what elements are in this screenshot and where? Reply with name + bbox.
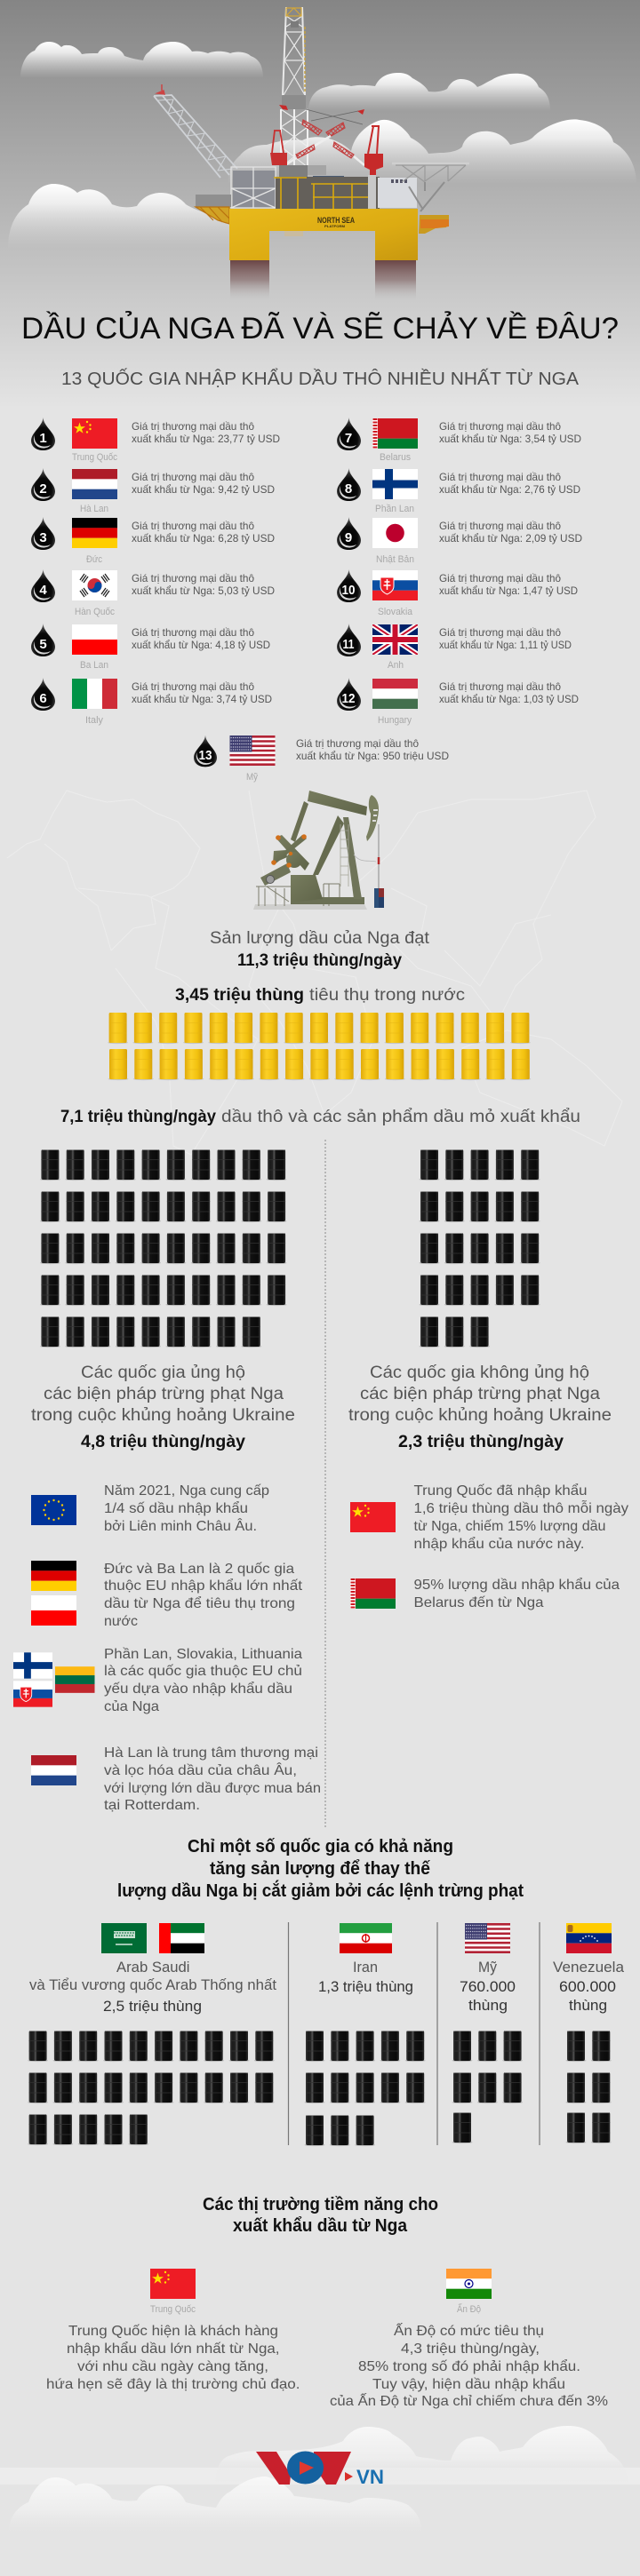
ladder xyxy=(340,824,348,886)
text xyxy=(104,1483,269,1534)
label: Arab Saudi xyxy=(116,1959,190,1976)
value text: xuất khẩu từ Nga: 2,09 tỷ USD xyxy=(439,532,582,545)
footer cloud: right xyxy=(215,2426,628,2485)
text: yếu dựa vào nhập khẩu dầu xyxy=(104,1681,292,1697)
fence xyxy=(256,884,340,906)
central pipework xyxy=(274,177,380,209)
text xyxy=(104,1562,303,1629)
flag xyxy=(150,2269,196,2299)
text: là các quốc gia thuộc EU chủ xyxy=(104,1664,302,1679)
value text xyxy=(132,420,280,445)
drop icon: 10 xyxy=(341,583,356,598)
accommodation block xyxy=(378,178,417,208)
drop icon: 9 xyxy=(345,530,352,545)
helideck xyxy=(392,163,469,211)
country row 13: United States xyxy=(194,735,449,783)
note: China xyxy=(350,1483,628,1552)
drop icon: 13 xyxy=(199,748,212,763)
label: Iran xyxy=(353,1959,378,1976)
value text xyxy=(132,471,275,496)
country name: Mỹ xyxy=(246,772,258,783)
description: nhập khẩu dầu lớn nhất từ Nga, xyxy=(67,2341,279,2357)
flag xyxy=(72,679,117,709)
value text xyxy=(132,572,275,597)
text xyxy=(104,1745,321,1813)
left side deck xyxy=(196,195,231,207)
drop icon xyxy=(194,735,217,767)
supporting countries caption: trong cuộc khủng hoảng Ukraine xyxy=(31,1406,295,1425)
value text: xuất khẩu từ Nga: 4,18 tỷ USD xyxy=(132,639,270,651)
value text: xuất khẩu từ Nga: 3,74 tỷ USD xyxy=(132,693,272,705)
base slab xyxy=(253,904,367,910)
description: Trung Quốc hiện là khách hàng xyxy=(68,2324,278,2339)
flag xyxy=(446,2269,492,2299)
drop icon xyxy=(337,569,361,602)
text: bởi Liên minh Châu Âu. xyxy=(104,1517,257,1534)
drop icon: 1 xyxy=(39,431,47,446)
value text xyxy=(439,471,580,496)
export text: dầu thô và các sản phẩm dầu mỏ xuất khẩu xyxy=(221,1108,580,1126)
country row 10: Slovakia xyxy=(337,569,578,617)
value text: Giá trị thương mại dầu thô xyxy=(439,520,561,532)
value text: Giá trị thương mại dầu thô xyxy=(132,680,254,693)
drop icon: 4 xyxy=(39,583,47,598)
hull legs lower xyxy=(230,260,416,300)
country row 1: China xyxy=(31,417,280,463)
footer cloud: left xyxy=(8,2477,422,2538)
dashed divider xyxy=(324,1140,326,1828)
counterweight xyxy=(273,835,309,871)
flag xyxy=(31,1755,76,1785)
drop icon xyxy=(337,678,361,711)
value text: xuất khẩu từ Nga: 6,28 tỷ USD xyxy=(132,532,275,545)
blue circle xyxy=(287,2452,324,2484)
description: 85% trong số đó phải nhập khẩu. xyxy=(358,2358,580,2374)
boom tip xyxy=(157,84,164,94)
label: thùng xyxy=(569,1997,607,2014)
motor disk xyxy=(267,876,274,883)
name: Trung Quốc xyxy=(150,2304,196,2315)
name: Ấn Độ xyxy=(457,2303,481,2315)
drop icon: 8 xyxy=(345,481,352,497)
value text: Giá trị thương mại dầu thô xyxy=(132,471,254,483)
heading: replacement producers: tăng sản lượng để thay thế xyxy=(210,1859,431,1879)
red lattice sections xyxy=(296,120,354,158)
flag xyxy=(566,1923,612,1953)
footer cloud band xyxy=(0,2468,640,2485)
value text xyxy=(439,520,582,545)
domestic consumption text: 3,45 triệu thùng xyxy=(175,986,304,1005)
red V letters xyxy=(256,2452,351,2485)
flag xyxy=(72,418,117,449)
non-supporting countries caption: 2,3 triệu thùng/ngày xyxy=(398,1433,564,1451)
flag xyxy=(340,1923,392,1953)
value text: Giá trị thương mại dầu thô xyxy=(439,680,561,693)
barrels xyxy=(565,2031,612,2143)
text: 1/4 số dầu nhập khẩu xyxy=(104,1500,248,1516)
barrels xyxy=(28,2031,275,2145)
value text: xuất khẩu từ Nga: 23,77 tỷ USD xyxy=(132,433,280,445)
label: 1,3 triệu thùng xyxy=(318,1978,413,1995)
flags xyxy=(31,1561,76,1626)
description: 4,3 triệu thùng/ngày, xyxy=(401,2341,540,2357)
subtitle: 13 QUỐC GIA NHẬP KHẨU DẦU THÔ NHIỀU NHẤT TỪ NGA xyxy=(61,368,580,389)
black barrels: supporting countries xyxy=(40,1149,287,1348)
label: Mỹ xyxy=(478,1959,497,1976)
value text: xuất khẩu từ Nga: 1,11 tỷ USD xyxy=(439,639,572,651)
text: nhập khẩu của nước này. xyxy=(414,1536,585,1552)
market: India xyxy=(330,2269,608,2409)
flags xyxy=(101,1923,204,1953)
gearbox stand xyxy=(291,875,323,902)
text: thuộc EU nhập khẩu lớn nhất xyxy=(104,1578,303,1594)
wellhead xyxy=(374,888,384,908)
flag xyxy=(465,1923,510,1953)
value text: Giá trị thương mại dầu thô xyxy=(439,626,561,639)
text: Trung Quốc đã nhập khẩu xyxy=(414,1483,587,1499)
value text: Giá trị thương mại dầu thô xyxy=(132,572,254,584)
drop icon xyxy=(337,624,361,656)
country row 12: Hungary xyxy=(337,678,579,726)
note: EU xyxy=(31,1483,269,1534)
drop icon xyxy=(31,624,55,656)
production text: 11,3 triệu thùng/ngày xyxy=(237,951,402,970)
text: từ Nga, chiếm 15% lượng dầu xyxy=(414,1519,606,1534)
domestic consumption text: tiêu thụ trong nước xyxy=(309,986,465,1005)
hose xyxy=(354,855,376,862)
blue containers xyxy=(313,176,344,179)
value text xyxy=(439,626,572,651)
platform name: NORTH SEA xyxy=(317,216,355,226)
description: hứa hẹn sẽ đây là thị trường chủ đạo. xyxy=(46,2377,300,2392)
label xyxy=(29,1959,276,2015)
heading: replacement producers: lượng dầu Nga bị cắt giảm bởi các lệnh trừng phạt xyxy=(117,1880,524,1901)
country name: Nhật Bản xyxy=(376,554,414,565)
flag xyxy=(372,570,418,600)
illustration: oil platform xyxy=(154,7,469,300)
text: và lọc hóa dầu của châu Âu, xyxy=(104,1761,297,1778)
orange bolts xyxy=(271,834,307,868)
heading: potential markets xyxy=(203,2195,438,2236)
non-supporting countries caption: Các quốc gia không ủng hộ xyxy=(370,1364,589,1382)
drop icon: 2 xyxy=(39,481,47,497)
title: DẦU CỦA NGA ĐÃ VÀ SẼ CHẢY VỀ ĐÂU? xyxy=(21,312,619,346)
value text: Giá trị thương mại dầu thô xyxy=(132,626,254,639)
right leg xyxy=(343,817,362,899)
label: thùng xyxy=(468,1997,508,2014)
export text: 7,1 triệu thùng/ngày xyxy=(60,1108,216,1126)
right red crane xyxy=(364,126,383,175)
description: với nhu cầu ngày càng tăng, xyxy=(77,2359,268,2374)
world map background xyxy=(7,791,622,1155)
drop icon xyxy=(31,517,55,550)
note: Belarus xyxy=(350,1577,620,1610)
label xyxy=(553,1959,625,2014)
yellow hull xyxy=(229,209,418,260)
barrels xyxy=(304,2031,426,2146)
text: 95% lượng dầu nhập khẩu của xyxy=(414,1577,620,1593)
text xyxy=(414,1577,620,1610)
description: của Ấn Độ từ Nga chỉ chiếm chưa đến 3% xyxy=(330,2392,608,2409)
note: Germany and Poland xyxy=(31,1561,303,1629)
rod red section xyxy=(378,857,380,864)
skid beam xyxy=(291,897,364,904)
value text: xuất khẩu từ Nga: 3,54 tỷ USD xyxy=(439,433,581,445)
value text xyxy=(132,680,272,705)
platform name: PLATFORM xyxy=(324,224,346,228)
country row 8: Finland xyxy=(337,468,580,514)
value text: Giá trị thương mại dầu thô xyxy=(439,471,561,483)
drop icon xyxy=(31,678,55,711)
text: Phần Lan, Slovakia, Lithuania xyxy=(104,1647,302,1662)
column: Iran xyxy=(304,1923,426,2146)
export text xyxy=(60,1108,580,1126)
value text: Giá trị thương mại dầu thô xyxy=(132,520,254,532)
country name: Italy xyxy=(85,715,103,726)
country row 3: Germany xyxy=(31,517,275,565)
heading: potential markets: Các thị trường tiềm năng cho xyxy=(203,2195,438,2214)
drive arm xyxy=(260,863,291,886)
value text: xuất khẩu từ Nga: 5,03 tỷ USD xyxy=(132,584,275,597)
label: Venezuela xyxy=(553,1959,625,1976)
derrick tower xyxy=(281,7,308,167)
country row 5: Poland xyxy=(31,624,270,671)
VOV.VN logo xyxy=(256,2452,384,2488)
crane boom xyxy=(154,95,237,178)
drop icon xyxy=(31,468,55,501)
value text: Giá trị thương mại dầu thô xyxy=(296,737,419,750)
value text: xuất khẩu từ Nga: 950 triệu USD xyxy=(296,750,449,762)
pitman arm xyxy=(291,801,308,842)
country name: Hàn Quốc xyxy=(75,607,115,617)
value text: xuất khẩu từ Nga: 9,42 tỷ USD xyxy=(132,483,275,496)
note: Finland, Slovakia, Lithuania xyxy=(13,1647,302,1714)
text: của Nga xyxy=(104,1699,159,1714)
illustration: pump jack xyxy=(253,791,384,910)
text xyxy=(414,1483,628,1552)
flag xyxy=(72,469,117,499)
value text xyxy=(132,520,275,545)
flag xyxy=(72,570,117,600)
drop icon xyxy=(337,468,361,501)
flags xyxy=(13,1652,94,1707)
non-supporting countries caption xyxy=(348,1364,612,1451)
country name: Đức xyxy=(86,554,102,565)
note: Netherlands xyxy=(31,1745,321,1813)
orange truss xyxy=(196,207,229,224)
supporting countries caption: Các quốc gia ủng hộ xyxy=(81,1364,245,1382)
value text: Giá trị thương mại dầu thô xyxy=(439,572,561,584)
country name: Hà Lan xyxy=(80,504,108,514)
drop icon xyxy=(337,417,361,450)
text xyxy=(104,1647,302,1714)
value text: xuất khẩu từ Nga: 2,76 tỷ USD xyxy=(439,483,580,496)
light boom xyxy=(283,136,364,167)
supporting countries caption: các biện pháp trừng phạt Nga xyxy=(44,1385,284,1403)
country name: Ba Lan xyxy=(80,660,108,671)
drop icon: 5 xyxy=(39,637,47,652)
black barrels: non-supporting countries xyxy=(420,1149,540,1348)
barrels xyxy=(452,2031,523,2143)
left process module xyxy=(231,167,276,208)
market: China xyxy=(46,2269,300,2392)
production text xyxy=(210,929,430,970)
production text: Sản lượng dầu của Nga đạt xyxy=(210,929,430,948)
country name: Belarus xyxy=(380,452,411,463)
country name: Phần Lan xyxy=(375,504,414,514)
value text xyxy=(439,680,579,705)
white column xyxy=(368,175,376,209)
non-supporting countries caption: trong cuộc khủng hoảng Ukraine xyxy=(348,1406,612,1425)
domestic consumption text xyxy=(175,986,465,1005)
drop icon: 3 xyxy=(39,530,47,545)
country row 2: Netherlands xyxy=(31,468,275,514)
drop icon xyxy=(31,569,55,602)
lifeboat xyxy=(419,215,449,234)
text: với lượng lớn dầu được mua bán xyxy=(104,1781,321,1796)
flag xyxy=(229,735,276,766)
description: Ấn Độ có mức tiêu thụ xyxy=(394,2322,544,2339)
label: và Tiểu vương quốc Arab Thống nhất xyxy=(29,1976,276,1993)
flag xyxy=(372,518,418,548)
polished rod xyxy=(378,824,380,890)
text: Hà Lan là trung tâm thương mại xyxy=(104,1745,318,1761)
text: tại Rotterdam. xyxy=(104,1798,200,1813)
value text: Giá trị thương mại dầu thô xyxy=(132,420,254,433)
text: 1,6 triệu thùng dầu thô mỗi ngày xyxy=(414,1499,628,1516)
cloud: lower left xyxy=(8,184,230,249)
country name: Anh xyxy=(388,660,404,671)
drop icon: 11 xyxy=(343,637,354,652)
play triangle xyxy=(300,2461,314,2475)
flag xyxy=(31,1495,76,1525)
walking beam xyxy=(308,791,367,815)
description xyxy=(330,2322,608,2409)
label: 600.000 xyxy=(559,1978,616,1995)
cloud: big right xyxy=(228,119,636,184)
description xyxy=(46,2324,300,2392)
non-supporting countries caption: các biện pháp trừng phạt Nga xyxy=(360,1385,600,1403)
flag xyxy=(350,1502,396,1532)
label xyxy=(318,1959,413,1995)
small arrow xyxy=(345,2472,353,2481)
header sky gradient xyxy=(0,0,640,409)
heading: potential markets: xuất khẩu dầu từ Nga xyxy=(233,2216,408,2236)
drop icon xyxy=(31,417,55,450)
flag xyxy=(372,679,418,709)
drop icon: 7 xyxy=(345,431,352,446)
value text xyxy=(439,420,581,445)
text: Đức và Ba Lan là 2 quốc gia xyxy=(104,1562,294,1577)
label xyxy=(460,1959,516,2014)
text: Năm 2021, Nga cung cấp xyxy=(104,1483,269,1499)
flag xyxy=(72,518,117,548)
text: nước xyxy=(104,1614,138,1629)
column: Venezuela xyxy=(553,1923,625,2143)
value text: xuất khẩu từ Nga: 1,03 tỷ USD xyxy=(439,693,579,705)
country row 6: Italy xyxy=(31,678,272,726)
heading: replacement producers xyxy=(117,1837,524,1901)
column dividers xyxy=(288,1922,540,2145)
flag xyxy=(372,418,418,449)
platform name xyxy=(317,216,355,228)
country row 7: Belarus xyxy=(337,417,581,463)
value text xyxy=(439,572,578,597)
drop icon xyxy=(337,517,361,550)
value text: Giá trị thương mại dầu thô xyxy=(439,420,561,433)
value text xyxy=(132,626,270,651)
country row 9: Japan xyxy=(337,517,582,565)
description: Tuy vậy, hiện dầu nhập khẩu xyxy=(372,2376,565,2392)
flag xyxy=(372,624,418,655)
text: dầu từ Nga để tiêu thụ trong xyxy=(104,1595,295,1611)
country row 11: United Kingdom xyxy=(337,624,572,671)
horsehead xyxy=(366,795,379,841)
column: United States xyxy=(452,1923,523,2143)
value text: xuất khẩu từ Nga: 1,47 tỷ USD xyxy=(439,584,578,597)
drop icon: 12 xyxy=(341,691,356,706)
country name: Slovakia xyxy=(378,607,413,617)
country row 4: South Korea xyxy=(31,569,275,617)
supporting countries caption xyxy=(31,1364,295,1451)
heading: replacement producers: Chỉ một số quốc gia có khả năng xyxy=(188,1837,453,1856)
text: Belarus đến từ Nga xyxy=(414,1595,544,1610)
value text xyxy=(296,737,449,762)
flag xyxy=(372,469,418,499)
deck house xyxy=(279,165,308,177)
flag xyxy=(350,1578,396,1609)
deck house right xyxy=(308,165,326,175)
drop icon: 6 xyxy=(39,691,47,706)
yellow barrels xyxy=(108,1013,531,1080)
VN text: VN xyxy=(356,2466,384,2488)
label: 2,5 triệu thùng xyxy=(103,1998,202,2015)
column: Saudi Arabia and UAE xyxy=(28,1923,276,2145)
flag xyxy=(72,624,117,655)
supporting countries caption: 4,8 triệu thùng/ngày xyxy=(81,1433,245,1451)
cloud: top right xyxy=(308,73,550,111)
label: 760.000 xyxy=(460,1978,516,1995)
country name: Hungary xyxy=(378,715,412,726)
A-frame legs xyxy=(313,815,344,875)
left red crane xyxy=(270,131,287,165)
country name: Trung Quốc xyxy=(72,452,117,463)
underdeck box xyxy=(284,231,303,236)
hooks xyxy=(279,105,364,115)
cables xyxy=(306,109,363,124)
cloud: top left xyxy=(20,42,263,78)
